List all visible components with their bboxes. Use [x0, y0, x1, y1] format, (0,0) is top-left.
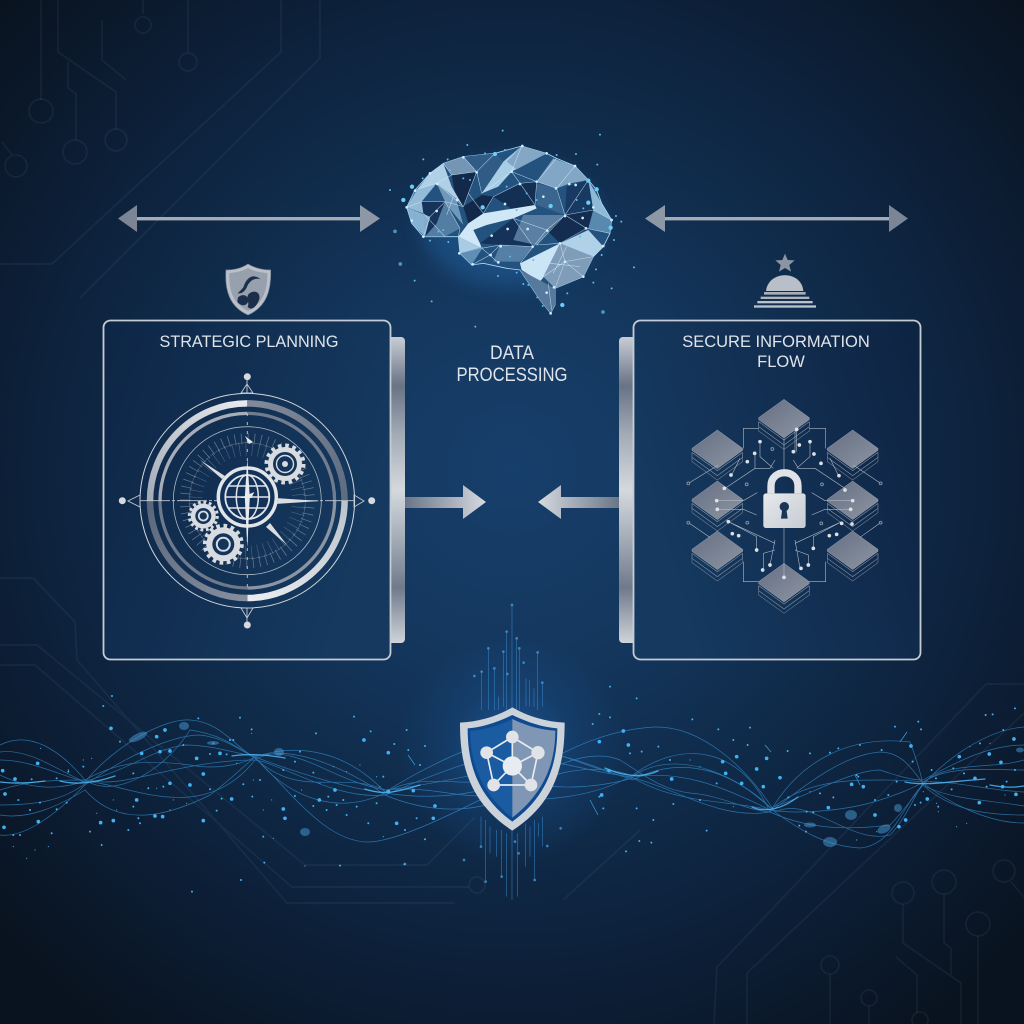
panel frame [104, 320, 390, 660]
wave particles right [593, 687, 1016, 851]
heading: secure information flow: SECURE INFORMATION [682, 333, 870, 351]
brain facets [407, 146, 612, 313]
heading: data processing: PROCESSING [456, 365, 568, 386]
wave smudges [127, 722, 1024, 847]
brain nodes [407, 146, 612, 313]
icon: small shield with globe [226, 264, 271, 315]
wave particles left [3, 696, 435, 892]
gear top right [266, 446, 304, 482]
arrow: top right double arrow [645, 205, 908, 232]
heading: secure information flow: FLOW [757, 353, 805, 371]
vertical data lines [405, 605, 561, 900]
icon: central security shield with network [460, 707, 565, 831]
globe [217, 459, 278, 547]
arrow: top left double arrow [118, 205, 380, 232]
gear middle left [189, 502, 217, 530]
side metal bar left panel [391, 337, 405, 643]
icon: polygon brain [390, 131, 634, 327]
brain wireframe [407, 146, 612, 310]
icon: star and dome [754, 254, 816, 308]
icon: compass with gears [119, 373, 375, 628]
data wave [0, 687, 1024, 892]
panel frame [634, 320, 920, 660]
panel: secure information flow [619, 320, 920, 660]
icon: lock with data plates [688, 399, 881, 613]
wave strands [0, 720, 1024, 848]
gear bottom left [205, 526, 242, 563]
brain glow [420, 160, 600, 287]
padlock [763, 473, 806, 528]
glow behind shield [397, 635, 627, 865]
wave short ticks [408, 732, 907, 815]
arrow: from strategic planning to data processing [405, 485, 486, 519]
panel: strategic planning [104, 320, 405, 660]
heading: data processing [456, 343, 568, 386]
shield network [480, 731, 545, 791]
arrow: from secure information flow to data processing [538, 485, 619, 519]
side metal bar right panel [619, 337, 633, 643]
bright wave cores [0, 755, 1024, 810]
heading: strategic planning: STRATEGIC PLANNING [160, 333, 338, 351]
heading: data processing: DATA [490, 343, 534, 364]
